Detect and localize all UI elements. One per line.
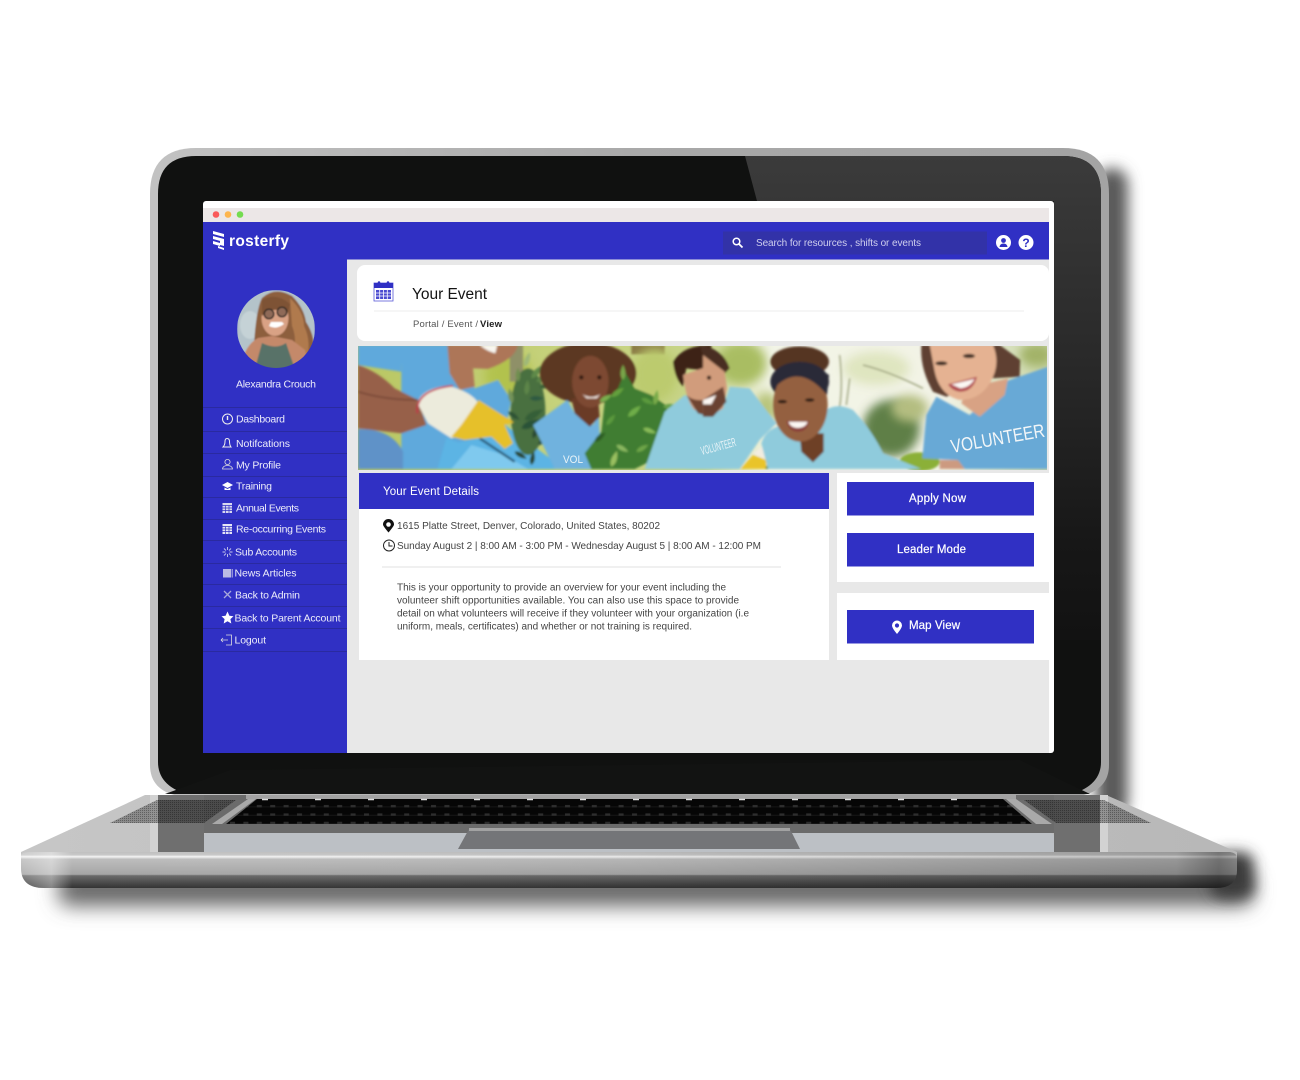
- address: 1615 Platte Street, Denver, Colorado, United States, 80202: [397, 521, 660, 532]
- search box: Search for resources , shifts or events: [756, 238, 921, 249]
- page header card: [357, 265, 1049, 341]
- description: This is your opportunity to provide an overview for your event including the: [397, 582, 726, 594]
- description: uniform, meals, certificates) and whether or not training is required.: [397, 622, 692, 632]
- foliage left: [485, 352, 531, 398]
- window title bar: [203, 208, 1049, 222]
- menu: My Profile: My Profile: [236, 460, 281, 472]
- search box: [723, 232, 987, 254]
- panel: map: [837, 593, 1049, 660]
- details heading bar: [359, 473, 829, 509]
- icon: help: [1018, 235, 1034, 250]
- laptop base deck: [21, 795, 1237, 858]
- laptop front edge: [21, 852, 1237, 888]
- menu: Sub Accounts: Sub Accounts: [235, 546, 297, 558]
- top navigation bar: [203, 222, 1049, 260]
- heading: Your Event: [412, 286, 488, 303]
- menu: Annual Events: Annual Events: [236, 502, 299, 514]
- breadcrumb: View: [480, 319, 503, 330]
- trees: [716, 342, 766, 385]
- gloves: [740, 455, 766, 469]
- photo left half: [358, 343, 711, 469]
- avatar: [237, 290, 315, 372]
- menu: Logout: Logout: [234, 634, 266, 646]
- laptop drop shadow: [58, 168, 1254, 906]
- icon: profile: [996, 235, 1011, 250]
- speaker grille left: [110, 800, 236, 823]
- shirt lettering: VOL: [563, 454, 583, 466]
- menu: Logout: [221, 634, 266, 646]
- keyboard: [226, 799, 1032, 824]
- dates: Sunday August 2 | 8:00 AM - 3:00 PM - Wednesday August 5 | 8:00 AM - 12:00 PM: [397, 541, 761, 552]
- shirt lettering: VOLUNTEER: [699, 435, 738, 458]
- lid glare: [745, 156, 1101, 640]
- icon: help: ?: [1022, 236, 1030, 250]
- panel: event details: [359, 473, 829, 660]
- menu: Training: Training: [236, 480, 272, 492]
- panel: event details: Your Event Details: [383, 486, 479, 498]
- button: leader mode: Leader Mode: [897, 544, 966, 556]
- shirt lettering: VOLUNTEER: [949, 421, 1046, 458]
- glove: [417, 386, 479, 438]
- photo right half: [686, 342, 1053, 471]
- watering can: [437, 422, 555, 469]
- person 3 body: [645, 395, 711, 469]
- button: leader mode: [847, 533, 1034, 566]
- speaker grille right: [1024, 800, 1151, 823]
- menu: Notifications: Notifcations: [236, 438, 290, 450]
- keyboard bevel: [212, 799, 256, 824]
- menu: News Articles: News Articles: [234, 568, 296, 580]
- shirt lettering: [563, 424, 1045, 463]
- palm rest: [204, 833, 1054, 855]
- person 5: [922, 367, 1048, 469]
- menu: Dashboard: Dashboard: [236, 414, 285, 426]
- description: detail on what volunteers will receive if they volunteer with your organization (i.e: [397, 608, 749, 620]
- user name: Alexandra Crouch: [236, 378, 316, 390]
- menu: Back to Parent Account: Back to Parent Account: [234, 612, 341, 624]
- description: volunteer shift opportunities available. You can also use this space to provide: [397, 596, 739, 606]
- person 2: [540, 343, 636, 404]
- button: map view: [847, 610, 1034, 644]
- menu dividers: [203, 408, 347, 652]
- person 1: [358, 345, 511, 469]
- person 4: [761, 406, 921, 469]
- button: map view: Map View: [909, 620, 961, 632]
- volunteer photo banner: [358, 342, 1053, 471]
- trackpad: [458, 829, 800, 849]
- description: [397, 582, 749, 632]
- icon: clock: [384, 540, 394, 551]
- menu: Back to Admin: Back to Admin: [235, 590, 300, 602]
- icon: location pin: [383, 519, 394, 532]
- sidebar: [203, 259, 347, 753]
- screen: [203, 201, 1054, 753]
- button: apply now: [847, 482, 1034, 516]
- panel: actions: [837, 473, 1049, 582]
- breadcrumb: Portal / Event /: [413, 319, 478, 330]
- person 3 head: [686, 387, 776, 469]
- plant left: [507, 352, 547, 466]
- button: apply now: Apply Now: [909, 493, 967, 505]
- icon: calendar: [374, 281, 393, 301]
- plant centre: [585, 372, 668, 469]
- logo: rosterfy: [229, 233, 289, 250]
- laptop lid: [150, 148, 1109, 796]
- menu: Re-occurring Events: Re-occurring Events: [236, 524, 326, 536]
